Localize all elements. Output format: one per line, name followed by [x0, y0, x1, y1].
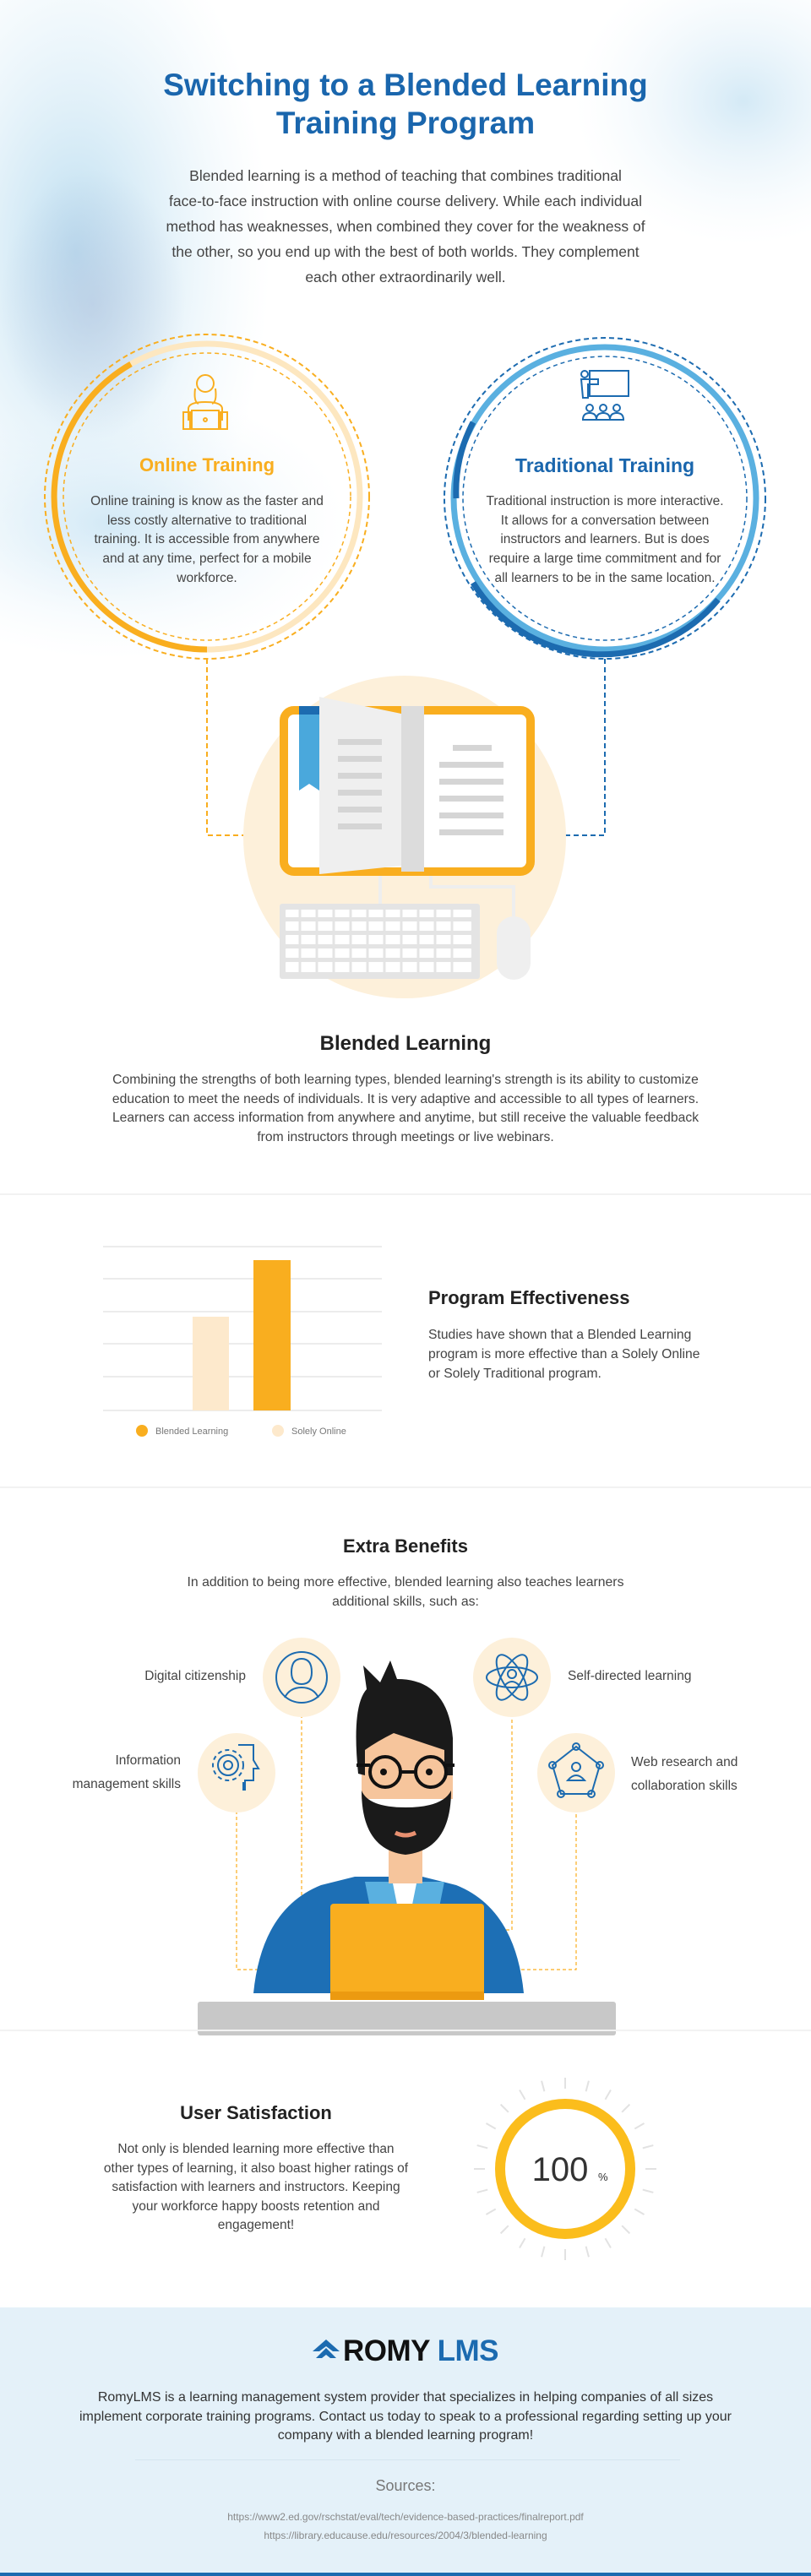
icon: web research: [537, 1733, 615, 1812]
text: sources links: https://library.educause.edu/resources/2004/3/blended-learning: [264, 2530, 547, 2541]
text: blended learning: from instructors through meetings or live webinars.: [257, 1130, 554, 1144]
text: traditional training: instructors and learners. But is does: [500, 532, 710, 546]
text: blended learning: Combining the strengths of both learning types, blended learning's strength is its ability to customize: [112, 1073, 699, 1087]
bar chart: program effectiveness: [103, 1246, 382, 1437]
heading: sources: Sources:: [375, 2477, 436, 2494]
title: [163, 68, 648, 140]
panel: traditional training circle: [444, 338, 765, 659]
text: company description: [79, 2390, 732, 2443]
background: hero photo wash: [0, 0, 811, 615]
gauge: 100%: [474, 2078, 656, 2260]
label: information management: management skills: [73, 1777, 181, 1791]
icon: digital citizenship: [263, 1638, 340, 1717]
text: online training: less costly alternative to traditional: [107, 514, 307, 528]
title: Switching to a Blended Learning: [163, 68, 648, 102]
text: online training: Online training is know as the faster and: [90, 494, 324, 508]
heading: traditional training: Traditional Training: [515, 454, 694, 476]
text: program effectiveness: [428, 1328, 699, 1381]
text: user satisfaction: other types of learning, it also boast higher ratings of: [104, 2160, 408, 2176]
label: web research: [631, 1755, 738, 1793]
text: program effectiveness: program is more effective than a Solely Online: [428, 1347, 699, 1361]
text: extra benefits intro: [188, 1575, 623, 1608]
label: self-directed learning: Self-directed learning: [568, 1669, 691, 1683]
icon: classroom: [580, 370, 629, 421]
title: Training Program: [276, 106, 535, 140]
footer panel: [0, 2307, 811, 2576]
intro text: face-to-face instruction with online course delivery. While each individual: [169, 193, 642, 209]
man: [198, 1660, 616, 2035]
text: blended learning: [112, 1073, 699, 1144]
heading: online training: Online Training: [139, 454, 275, 476]
intro text: the other, so you end up with the best of both worlds. They complement: [171, 243, 640, 260]
text: blended learning: Learners can access information from anywhere and anytime, but still receive the valuable feedback: [112, 1111, 699, 1125]
intro text: method has weaknesses, when combined they cover for the weakness of: [166, 218, 645, 235]
intro text: Blended learning is a method of teaching that combines traditional: [189, 167, 622, 184]
heading: user satisfaction: User Satisfaction: [180, 2102, 332, 2123]
text: sources links: [227, 2511, 584, 2541]
icon: online learner: [182, 374, 228, 430]
text: extra benefits intro: In addition to being more effective, blended learning also teaches learners: [188, 1575, 623, 1590]
text: traditional training: It allows for a conversation between: [501, 514, 709, 528]
illustration: benefits with man: [198, 1638, 616, 2035]
icon: self-directed learning: [473, 1638, 551, 1717]
text: online training: [90, 494, 324, 585]
text: user satisfaction: Not only is blended learning more effective than: [117, 2142, 395, 2156]
intro text: each other extraordinarily well.: [305, 269, 506, 285]
label: information management: Information: [115, 1753, 181, 1768]
legend: [136, 1425, 346, 1437]
text: traditional training: all learners to be in the same location.: [494, 571, 716, 585]
connector lines and circles: [44, 334, 766, 836]
gauge: 100%: %: [598, 2171, 608, 2183]
text: program effectiveness: or Solely Traditional program.: [428, 1367, 601, 1381]
text: user satisfaction: satisfaction with learners and instructors. Keeping: [112, 2180, 400, 2194]
logo: romy lms: ROMY LMS: [343, 2334, 498, 2367]
label: information management: [73, 1753, 181, 1791]
text: user satisfaction: [104, 2142, 409, 2232]
arrow: connectors to book: [207, 659, 605, 835]
text: traditional training: [486, 494, 724, 585]
text: online training: workforce.: [177, 571, 237, 585]
text: sources links: https://www2.ed.gov/rschstat/eval/tech/evidence-based-practices/finalreport.pdf: [227, 2511, 584, 2523]
heading: blended learning: Blended Learning: [320, 1032, 491, 1055]
text: company description: company with a blended learning program!: [278, 2428, 533, 2443]
intro text: [166, 167, 645, 285]
text: user satisfaction: engagement!: [218, 2218, 294, 2232]
gauge: 100%: 100: [532, 2151, 588, 2188]
label: web research: collaboration skills: [631, 1779, 738, 1793]
panel: online training circle: [45, 334, 369, 659]
illustration: book computer: [243, 676, 566, 998]
legend: Solely Online: [291, 1427, 346, 1437]
text: user satisfaction: your workforce happy boosts retention and: [133, 2199, 379, 2213]
text: extra benefits intro: additional skills, such as:: [332, 1595, 479, 1608]
text: online training: training. It is accessible from anywhere: [94, 532, 320, 546]
text: company description: implement corporate training programs. Contact us today to speak to a professional regarding setting up your: [79, 2409, 732, 2424]
legend: Blended Learning: [155, 1427, 228, 1437]
label: digital citizenship: Digital citizenship: [144, 1669, 246, 1683]
heading: extra benefits: Extra Benefits: [343, 1535, 468, 1557]
text: traditional training: Traditional instruction is more interactive.: [486, 494, 724, 508]
text: blended learning: education to meet the needs of individuals. It is very adaptive and accessible to all types of learners.: [112, 1092, 699, 1106]
label: web research: Web research and: [631, 1755, 738, 1769]
text: traditional training: require a large time commitment and for: [489, 552, 721, 566]
text: program effectiveness: Studies have shown that a Blended Learning: [428, 1328, 691, 1342]
text: online training: and at any time, perfect for a mobile: [102, 552, 312, 566]
icon: information management: [198, 1733, 275, 1812]
heading: program effectiveness: Program Effectiveness: [428, 1287, 629, 1308]
text: company description: RomyLMS is a learning management system provider that specializes in helping companies of all sizes: [98, 2390, 713, 2405]
